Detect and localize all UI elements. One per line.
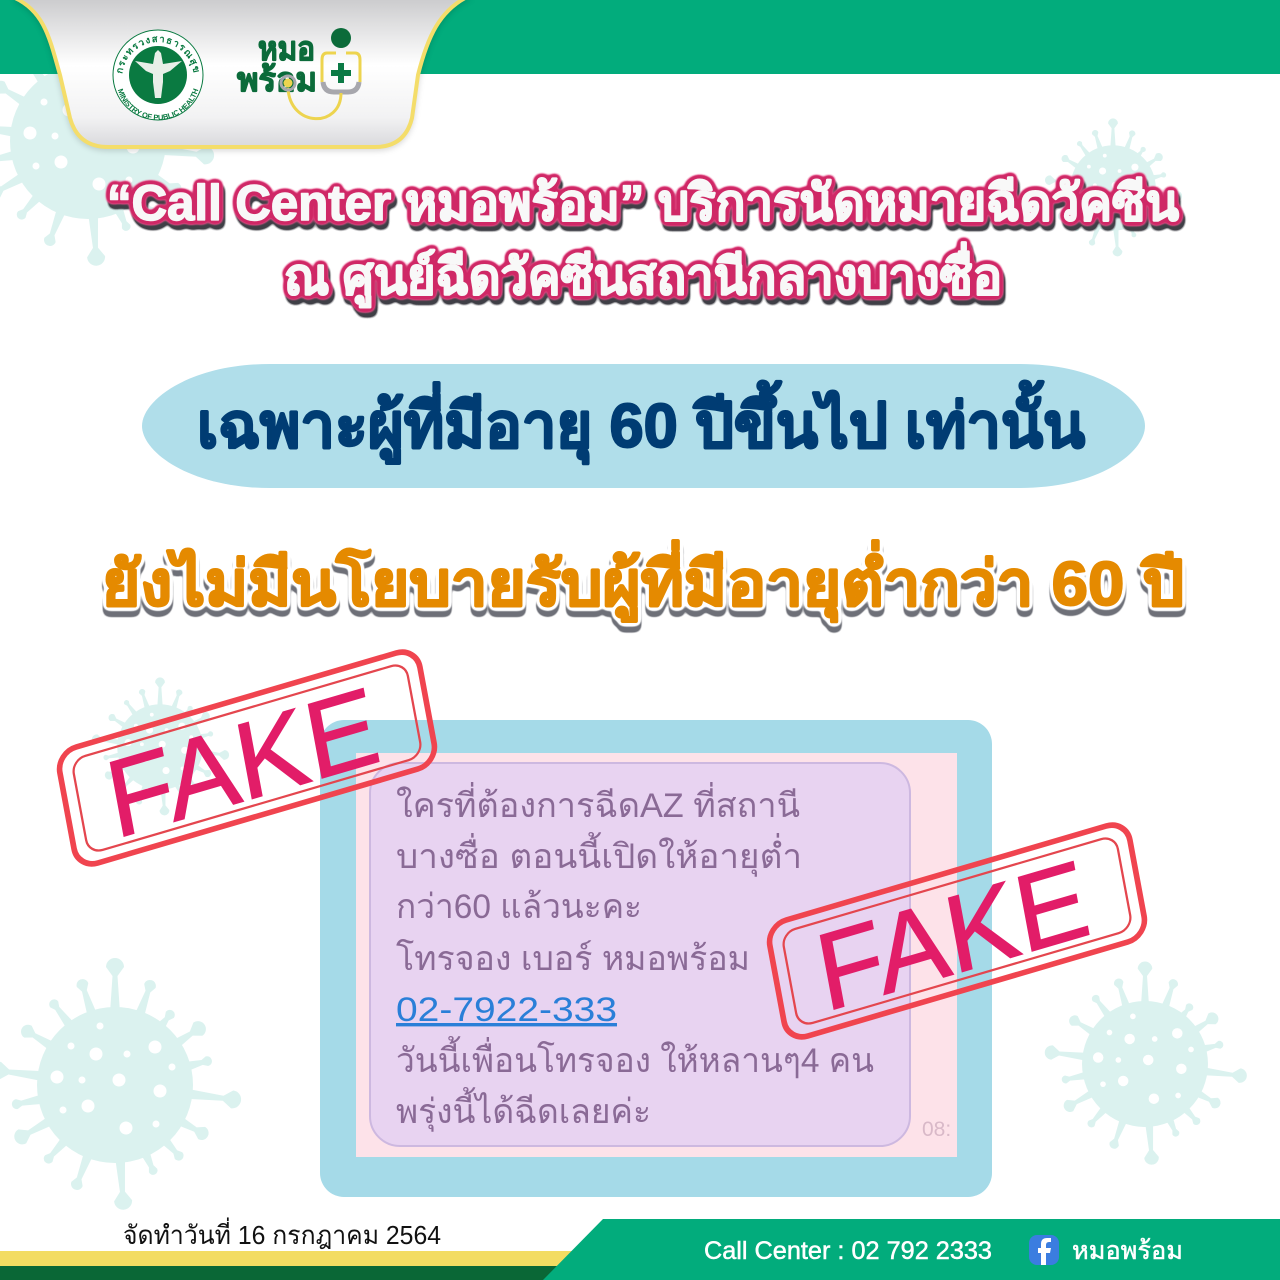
production date: จัดทำวันที่ 16 กรกฎาคม 2564 [123,1217,441,1250]
logo: mor prom: หมอ [258,30,315,67]
fake stamp left [56,647,439,874]
logo: mor prom: พร้อม [237,61,317,98]
header logo panel [15,0,465,147]
fake message screenshot panel: ใครที่ต้องการฉีดAZ ที่สถานี [396,782,800,825]
footer call center: Call Center : 02 792 2333 [704,1237,992,1265]
icon: virus top left [0,14,215,266]
logo: ministry of public health seal: MINISTRY OF PUBLIC HEALTH [118,88,198,120]
icon: virus behind stamp [91,677,230,816]
fake message screenshot panel: โทรจอง เบอร์ หมอพร้อม [396,939,750,978]
footer facebook name: หมอพร้อม [1072,1237,1183,1265]
title: ณ ศูนย์ฉีดวัคซีนสถานีกลางบางซื่อ [284,242,1002,308]
fake message screenshot panel: กว่า60 แล้วนะคะ [396,888,642,926]
logo: mor prom [237,28,360,119]
logo: ministry of public health seal [112,30,204,120]
fake stamp right [766,820,1149,1047]
icon: virus top right [1044,118,1183,257]
icon: virus bottom right [1044,961,1248,1165]
fake stamp left: FAKE [98,664,388,862]
fake message screenshot panel: พรุ่งนี้ได้ฉีดเลยค่ะ [396,1087,651,1132]
fake message screenshot panel: วันนี้เพื่อนโทรจอง ให้หลานๆ4 คน [396,1036,874,1080]
fake message screenshot panel [320,720,992,1197]
age condition pill: เฉพาะผู้ที่มีอายุ 60 ปีขึ้นไป เท่านั้น [197,380,1085,464]
footer bands [0,1219,1280,1280]
icon: virus bottom left [0,958,242,1210]
fake stamp right: FAKE [808,837,1098,1035]
fake message screenshot panel: 02-7922-333 [396,991,617,1029]
age condition pill [142,364,1145,488]
orange notice: ยังไม่มีนโยบายรับผู้ที่มีอายุต่ำกว่า 60 ปี [102,540,1184,622]
fake message screenshot panel: 08: [922,1118,951,1141]
logo: ministry of public health seal: กระทรวงสาธารณสุข [117,36,199,74]
title [107,175,1179,308]
header green band [0,0,1280,74]
icon: facebook [1029,1235,1059,1265]
title: “Call Center หมอพร้อม” บริการนัดหมายฉีดวัคซีน [107,175,1179,231]
fake message screenshot panel: บางซื่อ ตอนนี้เปิดให้อายุต่ำ [396,832,802,877]
